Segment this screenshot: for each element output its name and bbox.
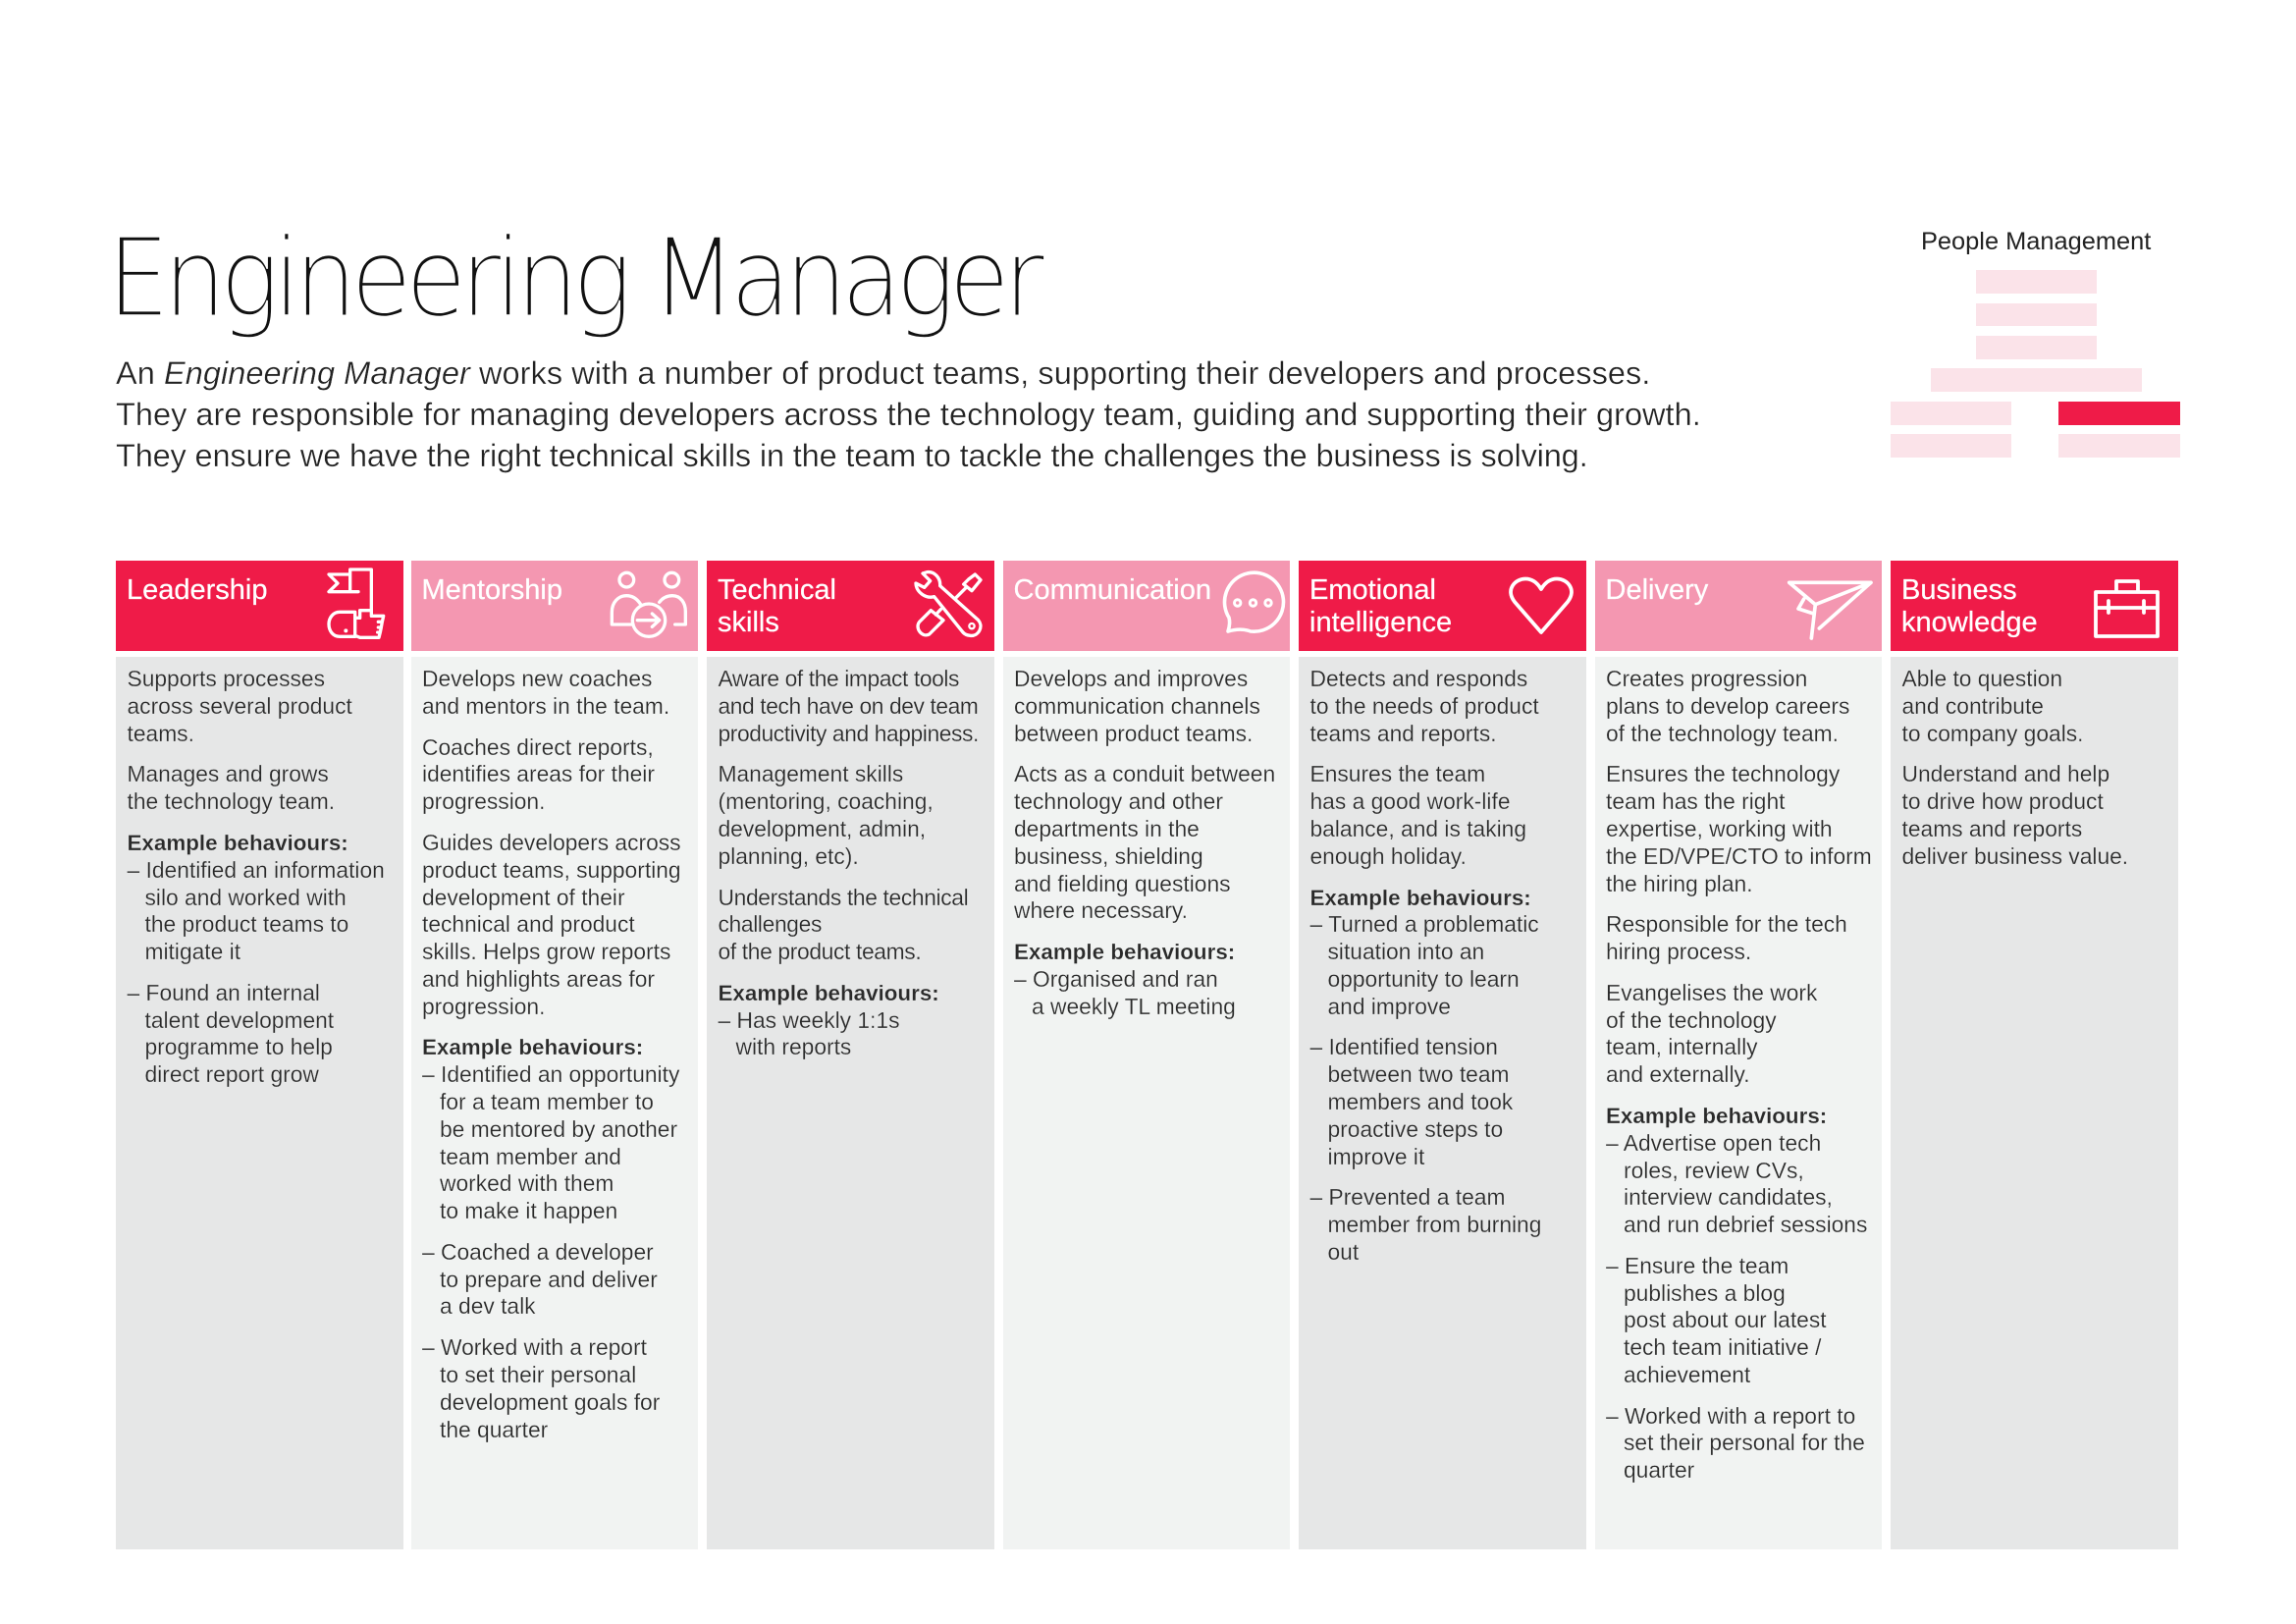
body text: between product teams.: [1014, 721, 1253, 746]
body text: roles, review CVs,: [1624, 1157, 1804, 1182]
body text: (mentoring, coaching,: [719, 788, 934, 814]
header label: skills: [718, 607, 779, 638]
body text: and fielding questions: [1014, 871, 1231, 896]
body text: Creates progression: [1606, 666, 1807, 691]
body text: hiring process.: [1606, 939, 1751, 964]
body text: Detects and responds: [1309, 666, 1527, 691]
body text: tech team initiative /: [1624, 1334, 1821, 1360]
header label: [1901, 573, 2038, 638]
body text: publishes a blog: [1624, 1280, 1786, 1306]
body text: team, internally: [1606, 1034, 1758, 1059]
body text: across several product: [128, 693, 352, 719]
body text: communication channels: [1014, 693, 1260, 719]
body text: team has the right: [1606, 788, 1785, 814]
column body: Leadership: [116, 657, 402, 1549]
header label: intelligence: [1309, 607, 1452, 638]
intro text: They ensure we have the right technical skills in the team to tackle the challenges the business is solving.: [116, 438, 1587, 473]
body text: Able to question: [1902, 666, 2062, 691]
body text: – Coached a developer: [422, 1239, 654, 1265]
body text: business, shielding: [1014, 843, 1203, 869]
body text: for a team member to: [440, 1089, 654, 1114]
header label: [1309, 573, 1452, 638]
body text: planning, etc).: [719, 843, 859, 869]
body text: where necessary.: [1014, 897, 1188, 923]
body text: – Prevented a team: [1309, 1184, 1505, 1210]
icon: heart: [1509, 577, 1574, 634]
column body: Delivery: [1594, 657, 1882, 1549]
body text: the quarter: [440, 1417, 548, 1442]
body text: – Organised and ran: [1014, 966, 1218, 992]
body text: balance, and is taking: [1309, 816, 1526, 841]
body text: out: [1327, 1239, 1359, 1265]
body text: deliver business value.: [1902, 843, 2128, 869]
body text: Evangelises the work: [1606, 980, 1817, 1005]
body text: Example behaviours:: [1309, 886, 1531, 910]
body text: members and took: [1327, 1089, 1513, 1114]
ladder diagram: [1891, 270, 2180, 458]
icon: two people and arrow: [611, 571, 687, 638]
header label: Emotional: [1309, 573, 1436, 605]
body text: – Found an internal: [128, 980, 320, 1005]
body text: plans to develop careers: [1606, 693, 1849, 719]
body text: to the needs of product: [1309, 693, 1539, 719]
body text: – Turned a problematic: [1309, 911, 1539, 937]
header label: knowledge: [1901, 607, 2038, 638]
body text: Understand and help: [1902, 761, 2109, 786]
body text: Aware of the impact tools: [719, 666, 959, 691]
body text: Ensures the team: [1309, 761, 1485, 786]
body text: to set their personal: [440, 1362, 636, 1387]
body text: quarter: [1624, 1457, 1694, 1483]
body text: to make it happen: [440, 1198, 617, 1223]
body text: to company goals.: [1902, 721, 2084, 746]
body text: be mentored by another: [440, 1116, 677, 1142]
body text: teams.: [128, 721, 194, 746]
body text: Ensures the technology: [1606, 761, 1840, 786]
body text: skills. Helps grow reports: [422, 939, 670, 964]
body text: [1014, 666, 1275, 1019]
ladder heading: People Management: [1921, 228, 2151, 255]
body text: direct report grow: [145, 1061, 319, 1087]
body text: teams and reports: [1902, 816, 2082, 841]
body text: mitigate it: [145, 939, 240, 964]
body text: Example behaviours:: [1606, 1104, 1827, 1128]
body text: – Ensure the team: [1606, 1253, 1789, 1278]
header label: Technical: [718, 573, 836, 605]
header label: [718, 573, 836, 638]
body text: and highlights areas for: [422, 966, 655, 992]
icon: wrench and screwdriver: [914, 569, 983, 638]
body text: development, admin,: [719, 816, 926, 841]
body text: [719, 666, 979, 1059]
body text: set their personal for the: [1624, 1430, 1865, 1455]
column header: Business knowledge: [1891, 561, 2177, 651]
title: Engineering Manager: [107, 214, 1038, 340]
body text: and run debrief sessions: [1624, 1212, 1867, 1237]
body text: progression.: [422, 994, 545, 1019]
intro text: An Engineering Manager works with a number of product teams, supporting their developers and processes.: [116, 355, 1650, 391]
column header: Delivery: [1594, 561, 1882, 651]
body text: Develops new coaches: [422, 666, 652, 691]
body text: post about our latest: [1624, 1307, 1827, 1332]
body text: Manages and grows: [128, 761, 329, 786]
body text: a weekly TL meeting: [1032, 994, 1236, 1019]
body text: Responsible for the tech: [1606, 911, 1847, 937]
body text: of the technology team.: [1606, 721, 1839, 746]
body text: [1606, 666, 1872, 1483]
column header: Mentorship: [410, 561, 698, 651]
column body: Technical skills: [707, 657, 993, 1549]
header label: Business: [1901, 573, 2017, 605]
body text: – Advertise open tech: [1606, 1130, 1821, 1156]
body text: Guides developers across: [422, 830, 681, 855]
body text: Example behaviours:: [128, 831, 348, 855]
header label: Delivery: [1606, 573, 1708, 605]
body text: the product teams to: [145, 911, 348, 937]
column body: Communication: [1003, 657, 1290, 1549]
intro text: [116, 355, 1701, 473]
body text: product teams, supporting: [422, 857, 681, 883]
column header: Leadership: [116, 561, 402, 651]
body text: Develops and improves: [1014, 666, 1248, 691]
body text: technical and product: [422, 911, 635, 937]
body text: between two team: [1327, 1061, 1510, 1087]
body text: and improve: [1327, 994, 1451, 1019]
body text: [1309, 666, 1541, 1265]
header label: Leadership: [127, 573, 267, 605]
body text: programme to help: [145, 1034, 333, 1059]
body text: departments in the: [1014, 816, 1200, 841]
body text: talent development: [145, 1007, 334, 1033]
body text: Example behaviours:: [719, 981, 939, 1005]
body text: progression.: [422, 788, 545, 814]
icon: speech bubble: [1223, 570, 1286, 633]
body text: the technology team.: [128, 788, 335, 814]
body text: teams and reports.: [1309, 721, 1497, 746]
body text: opportunity to learn: [1327, 966, 1520, 992]
body text: productivity and happiness.: [719, 721, 979, 746]
body text: – Identified an opportunity: [422, 1061, 679, 1087]
body text: Acts as a conduit between: [1014, 761, 1275, 786]
column body: Mentorship: [410, 657, 698, 1549]
body text: – Identified an information: [128, 857, 385, 883]
body text: [1902, 666, 2128, 869]
header label: Communication: [1013, 573, 1211, 605]
column header: Technical skills: [707, 561, 993, 651]
body text: Coaches direct reports,: [422, 734, 654, 760]
body text: and mentors in the team.: [422, 693, 669, 719]
body text: achievement: [1624, 1362, 1750, 1387]
body text: team member and: [440, 1144, 621, 1169]
role ladder: People Management: [1891, 228, 2180, 458]
body text: identifies areas for their: [422, 761, 655, 786]
body text: development goals for: [440, 1389, 660, 1415]
body text: technology and other: [1014, 788, 1223, 814]
body text: development of their: [422, 885, 625, 910]
header label: Mentorship: [422, 573, 562, 605]
body text: Example behaviours:: [1014, 940, 1235, 964]
body text: to prepare and deliver: [440, 1267, 658, 1292]
body text: of the product teams.: [719, 939, 921, 964]
body text: – Worked with a report to: [1606, 1403, 1855, 1429]
body text: Understands the technical: [719, 885, 968, 910]
body text: expertise, working with: [1606, 816, 1833, 841]
body text: interview candidates,: [1624, 1184, 1833, 1210]
body text: – Has weekly 1:1s: [719, 1007, 899, 1033]
body text: silo and worked with: [145, 885, 347, 910]
body text: [128, 666, 385, 1087]
body text: and contribute: [1902, 693, 2044, 719]
body text: improve it: [1327, 1144, 1424, 1169]
body text: – Identified tension: [1309, 1034, 1498, 1059]
body text: Management skills: [719, 761, 903, 786]
icon: paper plane: [1787, 581, 1873, 640]
body text: enough holiday.: [1309, 843, 1467, 869]
body text: worked with them: [440, 1170, 614, 1196]
body text: challenges: [719, 911, 822, 937]
intro text: They are responsible for managing developers across the technology team, guiding and supporting their growth.: [116, 397, 1701, 432]
body text: situation into an: [1327, 939, 1484, 964]
body text: and tech have on dev team: [719, 693, 979, 719]
body text: Example behaviours:: [422, 1035, 643, 1059]
body text: Supports processes: [128, 666, 325, 691]
body text: to drive how product: [1902, 788, 2104, 814]
body text: member from burning: [1327, 1212, 1541, 1237]
icon: briefcase: [2094, 579, 2160, 638]
body text: the ED/VPE/CTO to inform: [1606, 843, 1872, 869]
column header: Emotional intelligence: [1299, 561, 1586, 651]
body text: – Worked with a report: [422, 1334, 647, 1360]
column body: Emotional intelligence: [1299, 657, 1586, 1549]
body text: proactive steps to: [1327, 1116, 1503, 1142]
icon: flag and hand: [327, 568, 385, 639]
body text: with reports: [736, 1034, 851, 1059]
body text: [422, 666, 681, 1442]
body text: a dev talk: [440, 1293, 536, 1319]
body text: has a good work-life: [1309, 788, 1511, 814]
column body: Business knowledge: [1891, 657, 2177, 1549]
body text: and externally.: [1606, 1061, 1750, 1087]
body text: the hiring plan.: [1606, 871, 1753, 896]
column header: Communication: [1003, 561, 1290, 651]
body text: of the technology: [1606, 1007, 1777, 1033]
